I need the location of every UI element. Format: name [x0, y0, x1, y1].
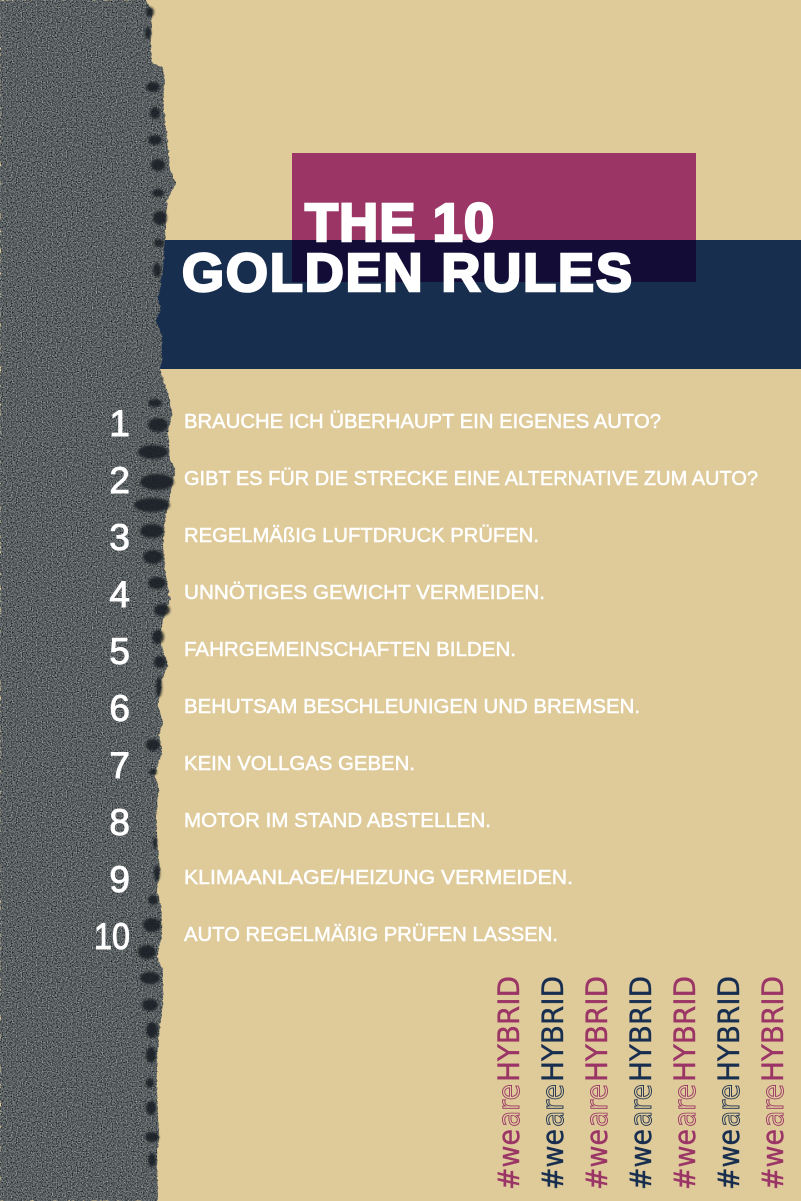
hashtag column 7: [756, 976, 790, 1190]
title: GOLDEN RULES: [182, 243, 632, 303]
hashtag column 5: [668, 976, 702, 1190]
hashtag column 5: HYBRID: [668, 976, 702, 1082]
hashtag column 7: HYBRID: [756, 976, 790, 1082]
rule numbers: 8: [109, 802, 130, 843]
hashtag column 3: #we: [580, 1129, 614, 1190]
rule numbers: 10: [94, 916, 130, 957]
hashtag column 6: HYBRID: [712, 976, 746, 1082]
rule numbers: [94, 403, 130, 957]
hashtag column 2: [536, 976, 570, 1190]
hashtag column 7: are: [756, 1084, 790, 1127]
title: [182, 193, 632, 303]
rule numbers: 1: [109, 403, 130, 444]
hashtag column 3: are: [580, 1084, 614, 1127]
torn paper strip: [0, 0, 176, 1201]
hashtag column 7: #we: [756, 1129, 790, 1190]
rules list: [184, 411, 758, 946]
rules list: MOTOR IM STAND ABSTELLEN.: [184, 810, 491, 832]
hashtag column 2: HYBRID: [536, 976, 570, 1082]
hashtag column 6: are: [712, 1084, 746, 1127]
hashtag column 6: [712, 976, 746, 1190]
rule numbers: 6: [109, 688, 130, 729]
panel: title band overlap: [292, 240, 696, 282]
rules list: KEIN VOLLGAS GEBEN.: [184, 753, 415, 775]
hashtag column 3: [580, 976, 614, 1190]
rule numbers: 7: [109, 745, 130, 786]
hashtag column 1: HYBRID: [492, 976, 526, 1082]
torn edge shadows: [134, 7, 174, 1167]
hashtag column 1: #we: [492, 1129, 526, 1190]
hashtag column 4: HYBRID: [624, 976, 658, 1082]
rules list: FAHRGEMEINSCHAFTEN BILDEN.: [184, 639, 516, 661]
rules list: BEHUTSAM BESCHLEUNIGEN UND BREMSEN.: [184, 696, 640, 718]
hashtag column 4: are: [624, 1084, 658, 1127]
rules list: UNNÖTIGES GEWICHT VERMEIDEN.: [184, 582, 545, 604]
hashtag column 5: are: [668, 1084, 702, 1127]
hashtag column 2: are: [536, 1084, 570, 1127]
rules list: AUTO REGELMÄßIG PRÜFEN LASSEN.: [184, 924, 558, 946]
rules list: REGELMÄßIG LUFTDRUCK PRÜFEN.: [184, 525, 539, 547]
hashtag column 6: #we: [712, 1129, 746, 1190]
panel: magenta title block: [292, 153, 696, 282]
rules list: GIBT ES FÜR DIE STRECKE EINE ALTERNATIVE ZUM AUTO?: [184, 468, 758, 490]
hashtag column 2: #we: [536, 1129, 570, 1190]
hashtag column 3: HYBRID: [580, 976, 614, 1082]
hashtag column 5: #we: [668, 1129, 702, 1190]
panel: navy title band: [150, 240, 801, 369]
hashtag column 4: [624, 976, 658, 1190]
rule numbers: 4: [109, 574, 130, 615]
title: THE 10: [305, 193, 494, 253]
rule numbers: 9: [109, 859, 130, 900]
rule numbers: 2: [109, 460, 130, 501]
rule numbers: 5: [109, 631, 130, 672]
hashtag column 1: are: [492, 1084, 526, 1127]
rule numbers: 3: [109, 517, 130, 558]
hashtag column 1: [492, 976, 526, 1190]
rules list: KLIMAANLAGE/HEIZUNG VERMEIDEN.: [184, 867, 573, 889]
hashtag column 4: #we: [624, 1129, 658, 1190]
rules list: BRAUCHE ICH ÜBERHAUPT EIN EIGENES AUTO?: [184, 411, 661, 433]
